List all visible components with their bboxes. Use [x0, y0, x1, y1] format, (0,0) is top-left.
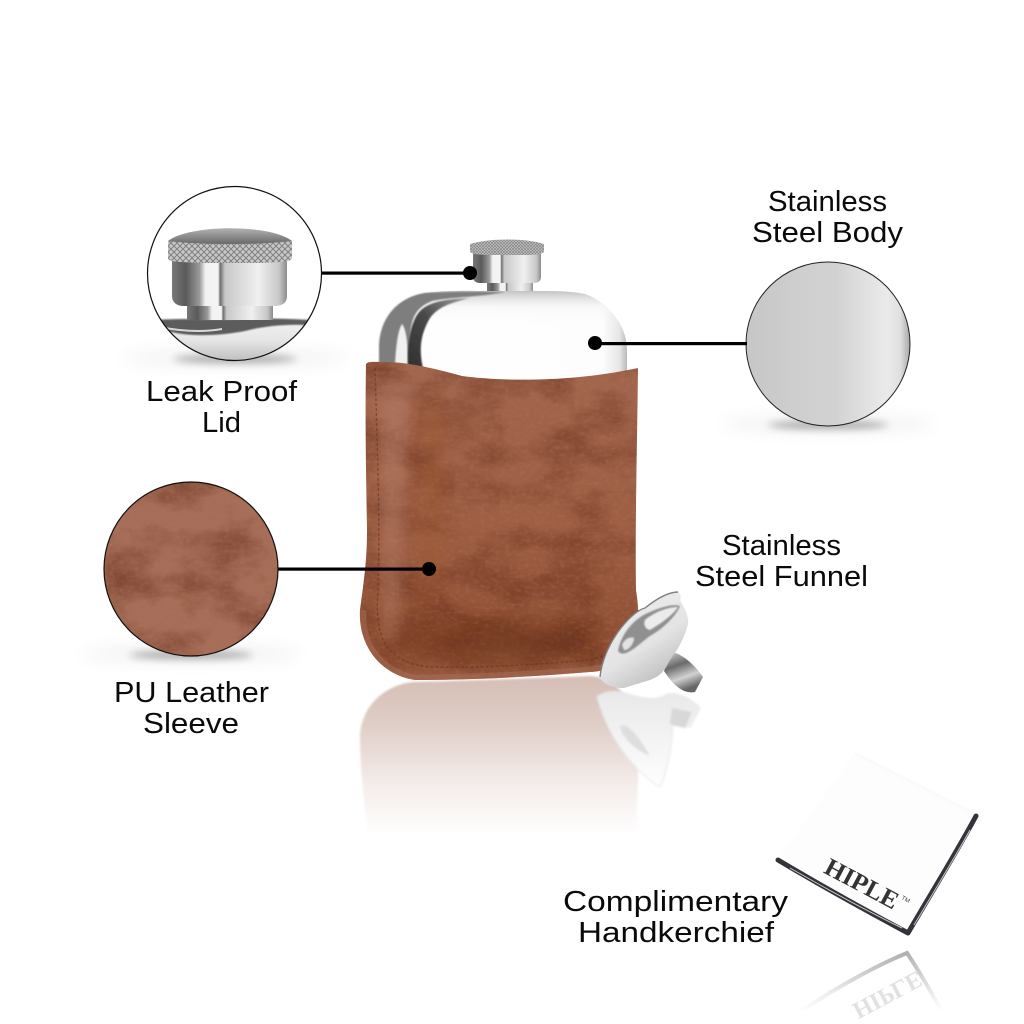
sleeve highlight	[378, 380, 410, 640]
sleeve dark bottom	[445, 627, 595, 657]
lid circle floor shadow	[120, 352, 350, 364]
label: leak proof lid	[146, 376, 298, 439]
funnel spout	[664, 652, 703, 692]
flask knurled cap	[470, 240, 544, 255]
connector: steel body	[588, 336, 747, 350]
label: stainless steel body: Steel Body	[752, 217, 904, 249]
flask reflection	[360, 676, 638, 835]
label: stainless steel funnel: Stainless	[722, 530, 841, 562]
label: stainless steel body	[752, 186, 904, 249]
connector: leather sleeve	[278, 562, 436, 576]
flask left white sliver	[395, 324, 408, 364]
label: complimentary handkerchief: Handkerchief	[578, 917, 775, 949]
connector: lid	[322, 266, 477, 280]
steel circle floor shadow	[720, 418, 936, 430]
handkerchief border highlight	[790, 830, 970, 928]
label: complimentary handkerchief: Complimentary	[563, 886, 789, 918]
handkerchief dark border	[778, 816, 976, 933]
funnel inner band	[618, 605, 680, 654]
handkerchief reflection: HIPLE	[848, 965, 926, 1023]
handkerchief brand: HIPLE	[820, 854, 903, 915]
label: stainless steel funnel	[695, 530, 868, 593]
leather circle floor shadow	[79, 648, 303, 660]
label: leak proof lid: Lid	[202, 407, 241, 439]
funnel cone	[600, 592, 688, 688]
funnel inner highlights	[644, 607, 678, 630]
circle: leather close-up	[104, 482, 278, 656]
label: stainless steel funnel: Steel Funnel	[695, 561, 868, 593]
flask leather sleeve	[355, 355, 645, 685]
flask steel body	[379, 291, 627, 375]
funnel	[600, 592, 703, 692]
label: leak proof lid: Leak Proof	[146, 376, 298, 408]
handkerchief reflection	[800, 953, 942, 1023]
label: stainless steel body: Stainless	[768, 186, 887, 218]
label: PU leather sleeve: Sleeve	[143, 708, 239, 740]
sleeve warm band	[424, 456, 431, 591]
label: PU leather sleeve: PU Leather	[114, 677, 269, 709]
flask	[355, 240, 645, 685]
funnel rim edge	[600, 592, 678, 677]
sleeve stitching	[374, 368, 605, 668]
handkerchief cloth	[777, 753, 977, 933]
flask left gray band	[379, 292, 505, 372]
circle: stainless steel close-up	[746, 262, 910, 426]
flask cap neck	[487, 280, 533, 293]
sleeve edge band	[360, 610, 602, 680]
circle: leak proof lid close-up	[147, 186, 322, 362]
handkerchief: TM	[900, 895, 911, 905]
label: PU leather sleeve	[114, 677, 269, 740]
handkerchief	[777, 753, 977, 933]
label: complimentary handkerchief	[563, 886, 789, 949]
flask dark band	[408, 298, 470, 368]
funnel reflection	[597, 691, 700, 787]
